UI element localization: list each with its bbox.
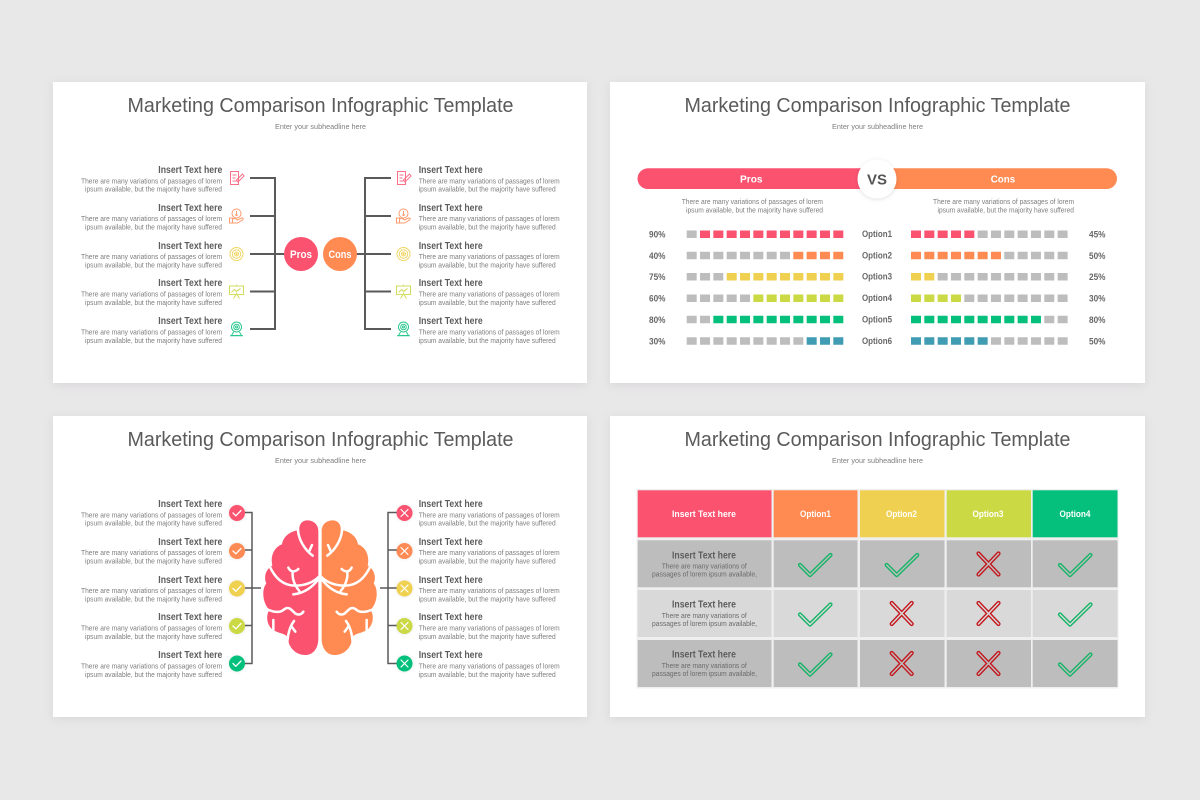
cons text 5: ipsum available, but the majority have suffered	[419, 338, 556, 345]
pros text 5	[81, 316, 223, 345]
icon: check badge pink	[229, 505, 245, 521]
icon: cross badge yellow	[396, 580, 412, 596]
cons text 5: There are many variations of passages of lorem	[419, 330, 560, 336]
right percentages: 50%	[1089, 251, 1106, 262]
table row 2	[638, 590, 1118, 637]
pros text 4: Insert Text here	[158, 278, 223, 289]
table row 2: Insert Text here	[672, 600, 736, 610]
pros circle: Pros	[290, 249, 312, 261]
pros list text 3: ipsum available, but the majority have suffered	[85, 596, 222, 603]
cons text 2: There are many variations of passages of lorem	[419, 216, 560, 223]
table row 3: passages of lorem ipsum available,	[652, 671, 757, 678]
right percentages	[1089, 230, 1106, 347]
cons list text 2: There are many variations of passages of lorem	[419, 550, 560, 557]
subheadline: Enter your subheadline here	[275, 122, 366, 131]
icon: webcam award	[230, 322, 243, 336]
pros text 1: Insert Text here	[158, 165, 223, 176]
table row 3: Insert Text here	[672, 650, 736, 660]
option labels: Option2	[862, 250, 892, 262]
cons text 1: Insert Text here	[419, 165, 483, 176]
cons description: ipsum available, but the majority have suffered	[938, 207, 1074, 214]
icon: check badge yellow	[229, 580, 245, 596]
VS badge	[858, 160, 896, 198]
pros text 2	[81, 203, 223, 231]
option labels: Option4	[862, 293, 893, 304]
cons list text 3: Insert Text here	[419, 575, 483, 586]
cons list text 3: There are many variations of passages of lorem	[419, 588, 560, 595]
cons pill: Cons	[991, 174, 1015, 186]
icon: hand with coin	[230, 209, 243, 223]
pros text 4	[81, 278, 223, 307]
pros text 3: Insert Text here	[158, 241, 223, 252]
subheadline: Enter your subheadline here	[832, 122, 923, 131]
cons list text 5: There are many variations of passages of lorem	[419, 664, 560, 670]
icon: target	[397, 248, 410, 260]
cons list text 4	[419, 612, 560, 641]
cons list text 4: Insert Text here	[419, 612, 483, 623]
left hemisphere	[263, 520, 319, 655]
cons text 1: There are many variations of passages of lorem	[419, 178, 560, 185]
cons list text 3	[419, 575, 560, 603]
pros text 1: There are many variations of passages of lorem	[81, 178, 222, 185]
pros text 4: ipsum available, but the majority have suffered	[85, 300, 222, 307]
pros list text 4: ipsum available, but the majority have suffered	[85, 634, 222, 641]
left percentages: 60%	[649, 294, 666, 304]
cons text 3: Insert Text here	[419, 241, 483, 252]
option labels	[862, 229, 893, 347]
icon: presentation board	[396, 284, 410, 298]
cons text 2: ipsum available, but the majority have suffered	[419, 224, 556, 231]
subheadline: Enter your subheadline here	[832, 456, 923, 465]
icon: check badge green	[229, 656, 245, 672]
left percentages: 30%	[649, 336, 666, 347]
left percentages	[649, 230, 666, 347]
table row 2: passages of lorem ipsum available,	[652, 621, 757, 628]
title: Marketing Comparison Infographic Template	[128, 94, 514, 117]
left percentages: 90%	[649, 230, 666, 240]
cons text 5: Insert Text here	[419, 316, 483, 327]
right connector	[380, 512, 397, 664]
pros text 5: ipsum available, but the majority have suffered	[85, 338, 222, 345]
pros list text 2: There are many variations of passages of lorem	[81, 550, 222, 557]
icon: presentation board	[230, 284, 244, 298]
header row: Option2	[886, 509, 917, 519]
pros list text 4: Insert Text here	[158, 612, 223, 623]
cons list text 3: ipsum available, but the majority have suffered	[419, 596, 556, 603]
cons text 1	[419, 165, 560, 194]
right tree connector	[356, 178, 391, 329]
cons list text 1	[419, 499, 560, 528]
table row 1	[638, 540, 1118, 587]
table row 1: passages of lorem ipsum available,	[652, 572, 757, 579]
pros text 2: ipsum available, but the majority have suffered	[85, 224, 222, 231]
cons text 2: Insert Text here	[419, 203, 483, 214]
cons list text 1: There are many variations of passages of lorem	[419, 512, 560, 519]
cons list text 5	[419, 650, 560, 679]
cons text 5	[419, 316, 560, 345]
cons text 3: ipsum available, but the majority have suffered	[419, 262, 556, 269]
right segmented bars	[911, 234, 1068, 341]
pros list text 3: There are many variations of passages of lorem	[81, 588, 222, 595]
pros description: ipsum available, but the majority have suffered	[686, 207, 823, 214]
icon: check badge orange	[229, 543, 245, 559]
pros pill	[638, 168, 878, 189]
left percentages: 40%	[649, 251, 666, 262]
pros text 1	[81, 165, 223, 194]
pros description: There are many variations of passages of lorem	[682, 199, 823, 206]
cons text 1: ipsum available, but the majority have suffered	[419, 187, 556, 194]
cons list text 4: ipsum available, but the majority have suffered	[419, 634, 556, 641]
right percentages: 50%	[1089, 336, 1106, 347]
left connector	[245, 512, 261, 664]
table row 3: There are many variations of	[662, 663, 747, 670]
icon: cross badge lime	[396, 618, 412, 634]
cons list text 2	[419, 537, 560, 565]
subheadline: Enter your subheadline here	[275, 456, 366, 465]
right percentages: 30%	[1089, 294, 1106, 304]
pros list text 4	[81, 612, 223, 641]
icon: cross badge orange	[396, 543, 412, 559]
pros text 3: There are many variations of passages of lorem	[81, 254, 222, 261]
right percentages: 45%	[1089, 230, 1106, 240]
panel: pros and cons tree	[53, 82, 587, 383]
pros list text 1: There are many variations of passages of lorem	[81, 512, 222, 519]
cons list text 2: Insert Text here	[419, 537, 483, 548]
icon: webcam award	[397, 322, 410, 336]
pros pill: Pros	[740, 174, 763, 186]
cons text 3: There are many variations of passages of lorem	[419, 254, 560, 261]
cons text 2	[419, 203, 560, 231]
pros list text 1: Insert Text here	[158, 499, 223, 510]
header row: Option4	[1060, 509, 1090, 519]
pros text 1: ipsum available, but the majority have suffered	[85, 187, 222, 194]
option labels: Option5	[862, 314, 893, 326]
pros list text 3	[81, 575, 223, 603]
pros list text 2: ipsum available, but the majority have suffered	[85, 558, 222, 565]
pros list text 1	[81, 499, 223, 528]
pros list text 1: ipsum available, but the majority have suffered	[85, 521, 222, 528]
icon: target	[230, 248, 243, 260]
icon: cross badge green	[396, 656, 412, 672]
cons pill	[877, 168, 1117, 189]
header row: Option1	[800, 509, 831, 519]
icon: document with pencil	[230, 172, 244, 184]
cons list text 1: Insert Text here	[419, 499, 483, 510]
cons circle: Cons	[328, 249, 352, 261]
right percentages: 80%	[1089, 315, 1106, 326]
pros list text 5	[81, 650, 223, 679]
left segmented bars	[687, 234, 844, 341]
panel: versus bar comparison	[610, 82, 1145, 383]
pros list text 5: Insert Text here	[158, 650, 223, 661]
table row 3	[638, 640, 1118, 687]
option labels: Option3	[862, 272, 892, 283]
pros text 4: There are many variations of passages of lorem	[81, 292, 222, 298]
icon: check badge lime	[229, 618, 245, 634]
option labels: Option6	[862, 336, 892, 347]
pros list text 2: Insert Text here	[158, 537, 223, 548]
table row 1: There are many variations of	[662, 563, 747, 570]
right hemisphere	[321, 520, 377, 655]
table row 1: Insert Text here	[672, 550, 736, 562]
cons list text 1: ipsum available, but the majority have suffered	[419, 521, 556, 528]
cons list text 4: There are many variations of passages of lorem	[419, 626, 560, 632]
title: Marketing Comparison Infographic Template	[684, 428, 1070, 451]
icon: hand with coin	[396, 209, 410, 223]
cons text 4	[419, 278, 560, 307]
cons circle	[323, 237, 357, 271]
table row 2: There are many variations of	[662, 613, 747, 620]
pros list text 5: There are many variations of passages of lorem	[81, 664, 222, 670]
pros text 2: There are many variations of passages of lorem	[81, 216, 222, 223]
pros text 3	[81, 241, 223, 269]
cons text 4: There are many variations of passages of lorem	[419, 292, 560, 298]
option labels: Option1	[862, 229, 893, 240]
cons description: There are many variations of passages of lorem	[933, 199, 1074, 206]
left tree connector	[250, 178, 284, 329]
cons text 4: ipsum available, but the majority have suffered	[419, 300, 556, 307]
cons list text 5: ipsum available, but the majority have suffered	[419, 672, 556, 679]
cons text 4: Insert Text here	[419, 278, 483, 289]
header row: Insert Text here	[672, 509, 736, 520]
pros text 3: ipsum available, but the majority have suffered	[85, 262, 222, 269]
pros list text 2	[81, 537, 223, 565]
left percentages: 80%	[649, 315, 666, 326]
title: Marketing Comparison Infographic Template	[684, 94, 1070, 117]
pros list text 4: There are many variations of passages of lorem	[81, 626, 222, 632]
pros circle	[284, 237, 318, 271]
header row: Option3	[972, 509, 1004, 519]
pros text 5: Insert Text here	[158, 316, 223, 327]
cons list text 2: ipsum available, but the majority have suffered	[419, 558, 556, 565]
pros list text 5: ipsum available, but the majority have suffered	[85, 672, 222, 679]
cons description	[933, 199, 1074, 214]
title: Marketing Comparison Infographic Template	[128, 428, 514, 451]
cons list text 5: Insert Text here	[419, 650, 483, 661]
pros text 5: There are many variations of passages of lorem	[81, 330, 222, 336]
pros list text 3: Insert Text here	[158, 575, 223, 586]
VS badge: VS	[867, 172, 887, 188]
icon: cross badge pink	[396, 505, 412, 521]
pros text 2: Insert Text here	[158, 203, 223, 214]
panel: brain comparison	[53, 416, 587, 717]
right percentages: 25%	[1089, 272, 1106, 283]
cons text 3	[419, 241, 560, 269]
table	[636, 489, 1118, 688]
panel: comparison table	[610, 416, 1145, 717]
pros description	[682, 199, 823, 214]
icon: document with pencil	[398, 172, 411, 184]
header row	[638, 490, 1118, 537]
left percentages: 75%	[649, 272, 666, 283]
brain illustration	[263, 520, 377, 655]
